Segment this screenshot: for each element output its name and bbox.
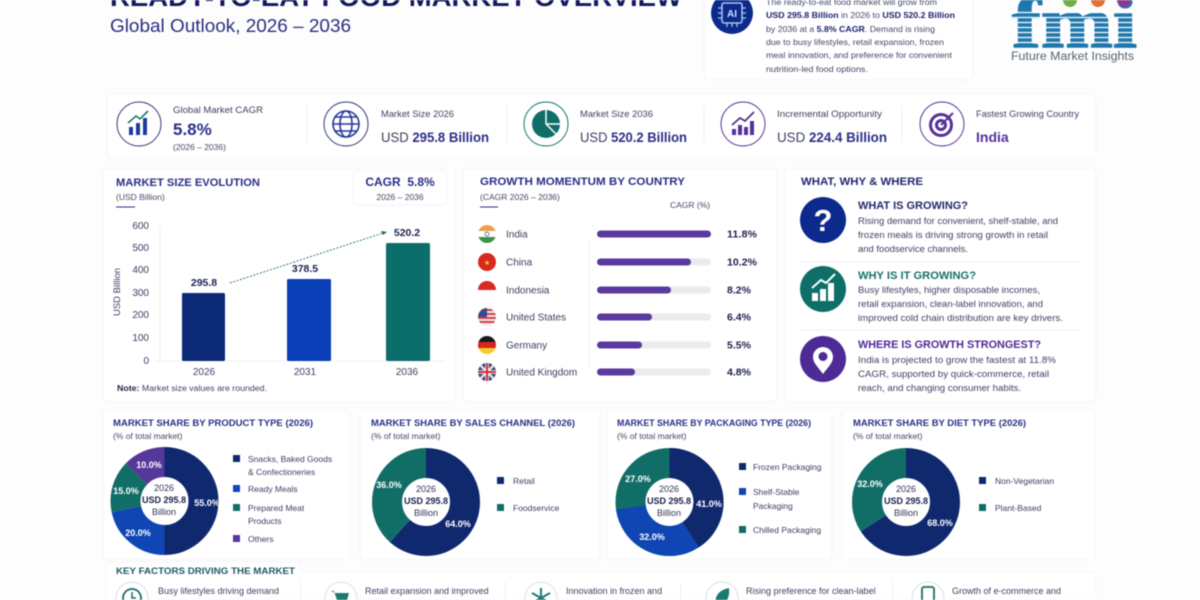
heading: KEY FACTORS DRIVING THE MARKET (116, 566, 295, 577)
CAGR callout: CAGR 5.8% (365, 175, 435, 189)
heading: GROWTH MOMENTUM BY COUNTRY (480, 176, 686, 188)
bar chart: 200 (132, 310, 149, 321)
heading (113, 418, 313, 441)
bar chart: 2036 (396, 367, 419, 378)
heading (116, 177, 260, 207)
legend: Frozen Packaging (753, 462, 822, 472)
donut chart: 2026 (154, 483, 174, 493)
block: what is growing: Rising demand for convenient, shelf-stable, and (858, 216, 1058, 227)
KPI: global market CAGR (117, 102, 264, 152)
summary text: meal innovation, and preference for convenient (766, 50, 953, 60)
row: India: 11.8% (727, 228, 758, 240)
legend (497, 476, 560, 513)
bar chart: 378.5 (292, 263, 318, 275)
row: China: China (506, 258, 533, 268)
KPI: fastest growing country: Fastest Growing Country (976, 109, 1080, 119)
heading: MARKET SHARE BY DIET TYPE (2026) (853, 418, 1026, 428)
heading: MARKET SHARE BY SALES CHANNEL (2026) (371, 418, 575, 428)
block: why is it growing: Busy lifestyles, higher disposable incomes, (858, 285, 1040, 296)
heading: WHAT, WHY & WHERE (801, 176, 923, 188)
heading (853, 418, 1026, 441)
KPI: market size 2026: USD 295.8 Billion (381, 129, 489, 145)
KPI: incremental opportunity (721, 102, 887, 146)
heading: (% of total market) (371, 431, 441, 441)
block: what is growing: WHAT IS GROWING? (858, 200, 968, 212)
donut chart: 2026 (416, 484, 436, 494)
donut chart (857, 463, 953, 541)
heading (371, 418, 575, 441)
bar chart: 300 (132, 288, 149, 299)
KPI: fastest growing country (920, 102, 1080, 146)
row: Germany (478, 336, 752, 354)
bar chart: 500 (132, 243, 149, 254)
legend: Prepared Meat (248, 503, 305, 513)
legend: Retail (513, 476, 535, 486)
legend: Products (248, 516, 282, 526)
heading: (CAGR 2026 – 2036) (480, 192, 560, 202)
bar chart (112, 221, 445, 378)
row: United Kingdom: United Kingdom (506, 368, 577, 378)
block: what is growing: ? (814, 203, 832, 238)
factor: retail expansion (325, 582, 489, 600)
factor: busy lifestyles: Busy lifestyles driving demand (158, 586, 279, 596)
panel: share by product type (103, 410, 350, 560)
CAGR callout: 2026 – 2036 (376, 192, 424, 202)
panel: key factors (107, 562, 1096, 600)
bar chart: 2026 (193, 367, 216, 378)
row: Indonesia: Indonesia (506, 286, 550, 296)
donut chart: 32.0% (639, 532, 665, 542)
factor: innovation in frozen: Innovation in frozen and (566, 586, 662, 596)
panel: AI summary (704, 0, 973, 80)
row: United States: United States (506, 312, 566, 324)
block: where is growth strongest: WHERE IS GROWTH STRONGEST? (858, 339, 1041, 351)
legend: Non-Vegetarian (995, 476, 1054, 486)
summary text: by 2036 at a 5.8% CAGR. Demand is rising (766, 24, 935, 34)
summary text: nutrition-led food options. (766, 64, 868, 74)
factor: e-commerce growth (912, 582, 1061, 600)
legend (233, 454, 332, 544)
block: where is growth strongest: reach, and changing consumer habits. (858, 383, 1021, 394)
block: why is it growing (800, 266, 1063, 324)
KPI: incremental opportunity: Incremental Opportunity (777, 109, 883, 119)
row: China: ★ (484, 259, 490, 267)
arrow: growth trend (230, 231, 387, 283)
summary text: USD 295.8 Billion in 2026 to USD 520.2 Billion (766, 10, 955, 20)
panel: share by diet type (842, 410, 1095, 560)
CAGR callout (353, 171, 447, 205)
block: what is growing: and foodservice channels. (858, 244, 968, 255)
panel: KPI strip (107, 94, 1096, 158)
KPI: fastest growing country: India (976, 129, 1009, 145)
icon: AI chip (711, 0, 753, 34)
block: why is it growing: improved cold chain distribution are key drivers. (858, 313, 1063, 324)
donut chart: 2026 (896, 484, 916, 494)
block: what is growing (800, 197, 1058, 255)
donut chart (625, 463, 722, 542)
donut chart: 2026 (659, 484, 679, 494)
legend: Others (248, 534, 274, 544)
heading: MARKET SHARE BY PRODUCT TYPE (2026) (113, 418, 313, 428)
row: United States (478, 308, 752, 326)
panel: market size evolution (103, 168, 455, 402)
heading: CAGR (%) (670, 200, 710, 210)
KPI: market size 2036 (524, 102, 687, 146)
row: United Kingdom: 4.8% (727, 366, 752, 378)
row: India: India (506, 230, 528, 240)
donut chart: USD 295.8 (404, 496, 448, 506)
panel: what, why and where (785, 168, 1096, 402)
bar chart: 295.8 (191, 277, 217, 289)
donut chart: 55.0% (194, 498, 220, 508)
factor: e-commerce growth: Growth of e-commerce and (952, 586, 1061, 596)
bar chart: 400 (132, 265, 149, 276)
panel: share by packaging type (607, 410, 832, 560)
legend: & Confectioneries (248, 467, 315, 477)
legend: Chilled Packaging (753, 525, 821, 535)
legend: Foodservice (513, 503, 560, 513)
panel: share by sales channel (360, 410, 600, 560)
bar chart: USD Billion (112, 268, 123, 316)
KPI: market size 2026: Market Size 2026 (381, 109, 454, 119)
factor: clean-label preference (706, 582, 876, 600)
heading: (USD Billion) (116, 192, 165, 202)
KPI: market size 2036: Market Size 2036 (580, 109, 653, 119)
donut chart (113, 460, 220, 540)
donut chart: USD 295.8 (142, 495, 186, 505)
summary text (766, 0, 955, 74)
row: United States: 6.4% (727, 312, 752, 324)
donut chart: 10.0% (136, 460, 162, 470)
KPI: market size 2026 (324, 102, 489, 146)
heading: (% of total market) (113, 431, 183, 441)
row: Germany: 5.5% (727, 340, 752, 352)
factor: clean-label preference: Rising preference for clean-label (746, 586, 876, 596)
donut chart: 32.0% (857, 479, 883, 489)
heading: (% of total market) (853, 431, 923, 441)
icon: AI chip: AI (727, 9, 737, 20)
KPI: global market CAGR: Global Market CAGR (173, 105, 264, 115)
block: where is growth strongest (800, 336, 1056, 394)
factor: retail expansion: Retail expansion and improved (365, 586, 489, 596)
block: why is it growing: retail expansion, clean-label innovation, and (858, 299, 1043, 310)
bar chart: 100 (132, 333, 149, 344)
row: Indonesia: 8.2% (727, 284, 752, 296)
donut chart: 64.0% (445, 519, 471, 529)
donut chart: Billion (894, 508, 918, 518)
KPI: market size 2036: USD 520.2 Billion (580, 129, 687, 145)
note: Note: Market size values are rounded. (117, 384, 267, 393)
legend: Shelf-Stable (753, 487, 800, 497)
factor: busy lifestyles (116, 582, 279, 600)
logo: Future Market Insights: Future Market Insights (1011, 51, 1134, 63)
donut chart: 27.0% (625, 474, 651, 484)
donut chart: 15.0% (113, 486, 139, 496)
donut chart: USD 295.8 (884, 496, 928, 506)
heading: (% of total market) (617, 431, 687, 441)
row: Germany: Germany (506, 340, 547, 352)
heading: MARKET SHARE BY PACKAGING TYPE (2026) (617, 418, 811, 428)
panel: growth momentum by country (477, 176, 758, 382)
KPI: global market CAGR: (2026 – 2036) (173, 142, 226, 152)
bar chart: 520.2 (394, 227, 420, 239)
legend (739, 462, 822, 535)
subtitle: Global Outlook, 2026 – 2036 (110, 16, 351, 36)
bar chart: 600 (132, 221, 149, 232)
KPI: global market CAGR: 5.8% (173, 120, 212, 139)
row: China: 10.2% (727, 256, 758, 268)
donut chart: Billion (414, 508, 438, 518)
row: Indonesia (477, 280, 752, 294)
legend: Snacks, Baked Goods (248, 454, 332, 464)
donut chart: 36.0% (376, 480, 402, 490)
legend (979, 476, 1054, 513)
donut chart: 68.0% (927, 518, 953, 528)
heading (480, 176, 710, 210)
heading: MARKET SIZE EVOLUTION (116, 177, 260, 189)
summary text: due to busy lifestyles, retail expansion, frozen (766, 37, 944, 47)
donut chart (376, 463, 471, 541)
legend: Plant-Based (995, 503, 1042, 513)
bar chart: 0 (143, 356, 149, 367)
heading (617, 418, 811, 441)
block: why is it growing: WHY IS IT GROWING? (858, 270, 976, 282)
bar chart: 2031 (294, 367, 317, 378)
block: where is growth strongest: India is projected to grow the fastest at 11.8% (858, 355, 1056, 366)
factor: innovation in frozen (525, 582, 662, 600)
row: United Kingdom (478, 363, 752, 381)
row: China (478, 253, 758, 271)
legend: Ready Meals (248, 484, 298, 494)
legend: Packaging (753, 501, 793, 511)
donut chart: USD 295.8 (647, 496, 691, 506)
donut chart: Billion (152, 507, 176, 517)
block: what is growing: frozen meals is driving strong growth in retail (858, 230, 1048, 241)
KPI: incremental opportunity: USD 224.4 Billion (777, 129, 887, 145)
donut chart: 41.0% (696, 499, 722, 509)
block: where is growth strongest: CAGR, supported by quick-commerce, retail (858, 369, 1049, 380)
row: India (478, 225, 758, 243)
donut chart: Billion (657, 508, 681, 518)
donut chart: 20.0% (125, 528, 151, 538)
